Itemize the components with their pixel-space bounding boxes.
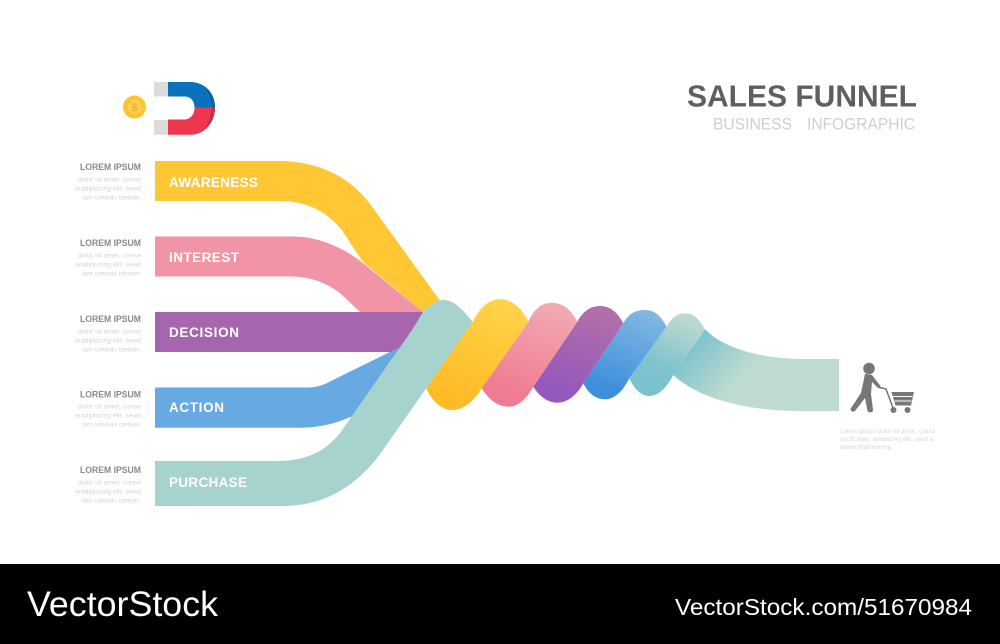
caption: awareness: iam umeuis ctetuer. xyxy=(82,194,141,202)
caption: interest xyxy=(75,238,141,278)
caption: purchase xyxy=(75,465,141,504)
icon: shopper with cart xyxy=(850,363,914,413)
band: action xyxy=(155,340,420,428)
caption: decision: dolor sit amet, conse xyxy=(78,328,141,336)
caption: decision xyxy=(75,314,141,354)
band: awareness xyxy=(155,161,441,312)
band: decision xyxy=(155,312,430,352)
label: interest: INTEREST xyxy=(169,250,240,265)
caption: purchase: dolor sit amet, conse xyxy=(78,480,141,486)
caption: awareness: dolor sit amet, conse xyxy=(78,176,141,184)
caption: shopper text xyxy=(840,428,935,451)
magnet body xyxy=(168,82,215,135)
twist: pale teal segment xyxy=(629,313,705,396)
left column captions xyxy=(75,162,141,505)
footer logo: VectorStock xyxy=(27,585,219,624)
caption: decision: LOREM IPSUM xyxy=(80,314,141,325)
label: action: ACTION xyxy=(169,400,224,415)
caption: awareness xyxy=(75,162,141,202)
caption: interest: eradipiscing elit, sewd xyxy=(75,262,141,268)
title: sales funnel: SALES FUNNEL xyxy=(687,78,917,114)
footer url: VectorStock.com/51670984 xyxy=(675,594,972,620)
caption: shopper text: secth truer. adipiscing elit, seed a xyxy=(840,436,933,443)
caption: decision: eradipiscing elit, sewd xyxy=(75,338,141,344)
caption: purchase: eradipiscing elit, sewd xyxy=(75,488,141,496)
label: awareness: AWARENESS xyxy=(169,175,258,190)
title: sales funnel xyxy=(687,78,917,134)
caption: purchase: LOREM IPSUM xyxy=(80,465,141,476)
band: purchase xyxy=(155,300,473,506)
caption: action: LOREM IPSUM xyxy=(80,389,141,400)
twist: pink segment xyxy=(482,303,577,407)
magnet poles xyxy=(154,82,168,135)
caption: awareness: eradipiscing elit, sewd xyxy=(75,186,141,192)
caption: action: eradipiscing elit, sewd xyxy=(75,412,141,420)
subtitle xyxy=(713,114,915,134)
subtitle: BUSINESS xyxy=(713,114,792,134)
caption: interest: iam umeuis ctetuer. xyxy=(82,270,141,278)
twist: blue segment xyxy=(583,310,667,399)
caption: awareness: LOREM IPSUM xyxy=(80,162,141,173)
footer bar xyxy=(0,564,1000,644)
caption: shopper text: damnofgdnummy. xyxy=(840,444,892,451)
twist tail ribbon xyxy=(673,329,839,411)
twist: yellow segment xyxy=(426,299,528,410)
label: decision: DECISION xyxy=(169,325,239,340)
caption: decision: iam umeuis ctetuer. xyxy=(82,346,141,354)
caption: action xyxy=(75,389,141,428)
twist: purple segment xyxy=(533,306,623,403)
caption: action: dolor sit amet, conse xyxy=(78,404,141,410)
icon: magnet and coin xyxy=(123,82,215,135)
caption: interest: dolor sit amet, conse xyxy=(78,252,141,260)
caption: action: iam umeuis ctetuer. xyxy=(82,422,141,428)
caption: interest: LOREM IPSUM xyxy=(80,238,141,249)
caption: purchase: iam umeuis ctetuer. xyxy=(82,498,141,504)
icon: coin: $ xyxy=(131,102,138,114)
caption: shopper text: Lorem ipsum dolor sit amet, coasd xyxy=(840,428,935,435)
label: purchase: PURCHASE xyxy=(169,475,247,490)
subtitle: INFOGRAPHIC xyxy=(807,114,915,134)
band: interest xyxy=(155,236,423,312)
